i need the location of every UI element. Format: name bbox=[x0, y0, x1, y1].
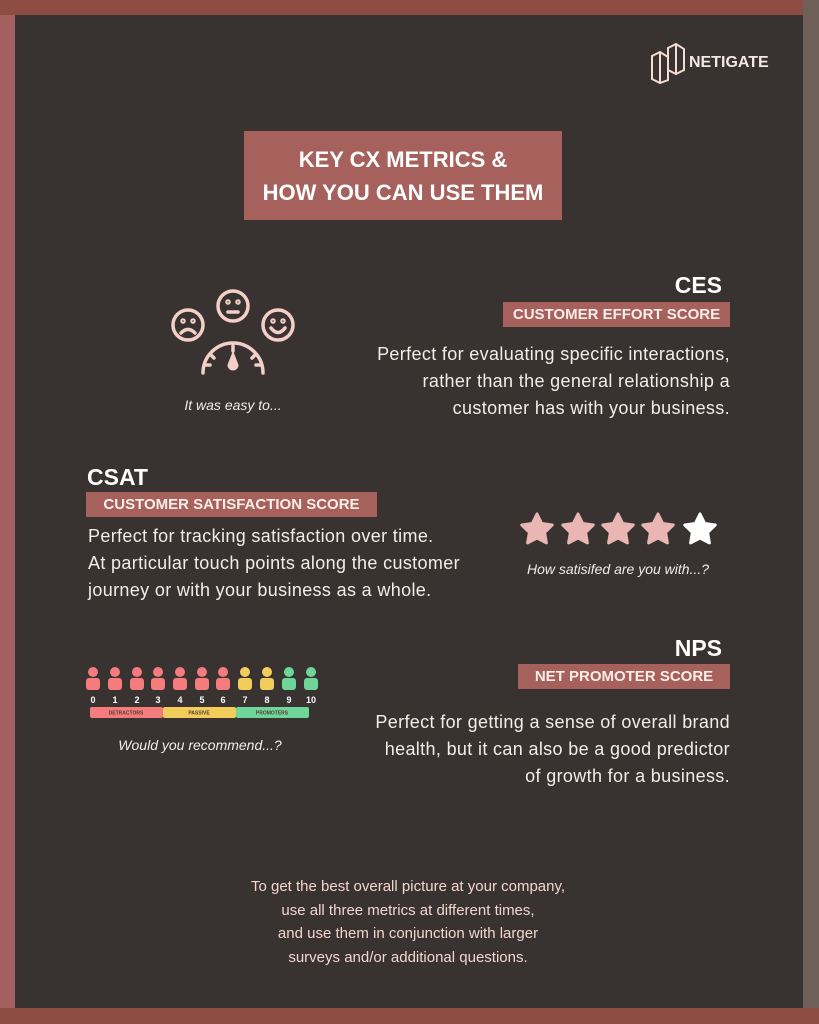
footer text: use all three metrics at different times, bbox=[281, 902, 535, 918]
CSAT text: At particular touch points along the customer bbox=[88, 553, 460, 573]
title: KEY CX METRICS & bbox=[299, 147, 507, 172]
icon: NPS scale: PROMOTERS bbox=[256, 710, 289, 716]
NPS label bbox=[518, 664, 730, 689]
footer text: To get the best overall picture at your company, bbox=[251, 878, 565, 895]
icon: NPS scale: 4 bbox=[177, 695, 183, 705]
icon: NPS scale: 5 bbox=[199, 695, 205, 705]
NPS heading: NPS bbox=[675, 635, 722, 661]
CES text: rather than the general relationship a bbox=[422, 371, 730, 391]
icon: NPS scale: DETRACTORS bbox=[109, 710, 144, 716]
CSAT text: Perfect for tracking satisfaction over time. bbox=[88, 526, 434, 546]
icon: NPS scale: 10 bbox=[306, 695, 316, 705]
NPS text bbox=[375, 712, 730, 786]
footer text: and use them in conjunction with larger bbox=[278, 925, 538, 942]
logo: Netigate: NETIGATE bbox=[689, 54, 769, 71]
CES label: CUSTOMER EFFORT SCORE bbox=[513, 306, 720, 323]
logo: Netigate bbox=[651, 42, 769, 84]
icon: NPS scale bbox=[86, 667, 318, 718]
caption: CSAT: How satisifed are you with...? bbox=[527, 561, 709, 577]
title: HOW YOU CAN USE THEM bbox=[263, 180, 543, 205]
NPS label: NET PROMOTER SCORE bbox=[535, 668, 713, 685]
footer text: surveys and/or additional questions. bbox=[288, 948, 528, 966]
CSAT heading: CSAT bbox=[87, 464, 148, 490]
NPS text: of growth for a business. bbox=[525, 766, 730, 786]
CSAT label: CUSTOMER SATISFACTION SCORE bbox=[103, 496, 360, 513]
caption: NPS: Would you recommend...? bbox=[118, 737, 282, 753]
NPS text: health, but it can also be a good predictor bbox=[385, 739, 730, 759]
footer text bbox=[251, 878, 565, 966]
icon: NPS scale: PASSIVE bbox=[188, 710, 210, 716]
CES text bbox=[377, 344, 730, 418]
icon: NPS scale: 8 bbox=[264, 695, 270, 705]
icon: NPS scale: 0 bbox=[90, 695, 96, 705]
CES text: Perfect for evaluating specific interactions, bbox=[377, 344, 730, 364]
NPS text: Perfect for getting a sense of overall brand bbox=[375, 712, 730, 732]
icon: NPS scale: 1 bbox=[112, 695, 118, 705]
icon: NPS scale: 2 bbox=[134, 695, 140, 705]
icon: NPS scale: 6 bbox=[220, 695, 226, 705]
CSAT text bbox=[88, 526, 460, 600]
title bbox=[244, 131, 562, 220]
icon: stars bbox=[520, 512, 717, 544]
icon: CES faces and gauge bbox=[171, 289, 295, 375]
CES label bbox=[503, 302, 730, 327]
CES heading: CES bbox=[675, 272, 722, 298]
icon: NPS scale: 7 bbox=[242, 695, 248, 705]
icon: NPS scale: 3 bbox=[155, 695, 161, 705]
icon: NPS scale: 9 bbox=[286, 695, 292, 705]
caption: CES: It was easy to... bbox=[184, 397, 282, 413]
CES text: customer has with your business. bbox=[453, 398, 730, 418]
CSAT text: journey or with your business as a whole. bbox=[88, 580, 432, 600]
CSAT label bbox=[86, 492, 377, 517]
